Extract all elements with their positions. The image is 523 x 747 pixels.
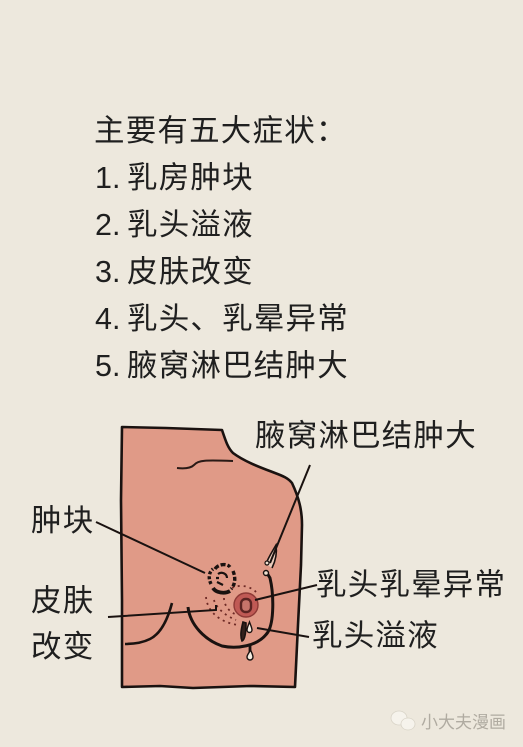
symptom 4: 乳头、乳晕异常 — [127, 302, 349, 336]
symptom 4: 4. — [95, 302, 120, 336]
watermark text: 小大夫漫画 — [421, 713, 506, 732]
label: nipple discharge: 乳头溢液 — [312, 619, 439, 653]
icon: nipple and areola — [234, 593, 258, 617]
symptom list — [94, 114, 349, 383]
right breast curve — [188, 573, 273, 647]
list heading: 主要有五大症状： — [94, 114, 348, 148]
symptom 1: 1. — [95, 161, 120, 195]
icon: discharge drops — [241, 622, 253, 660]
skin change dots — [206, 586, 256, 625]
collarbone line — [177, 460, 233, 468]
torso illustration — [121, 427, 302, 688]
symptom 1: 乳房肿块 — [127, 161, 254, 195]
label: axillary lymph nodes: 腋窝淋巴结肿大 — [255, 419, 477, 453]
icon: watermark logo — [391, 711, 415, 730]
icon: lump — [209, 565, 235, 593]
symptom 5: 腋窝淋巴结肿大 — [127, 349, 349, 383]
leader lines — [96, 465, 317, 637]
symptom 3: 3. — [95, 255, 120, 289]
left breast curve — [125, 603, 172, 644]
label: nipple and areola: 乳头乳晕异常 — [316, 568, 506, 602]
label: lump: 肿块 — [31, 504, 94, 538]
symptom 2: 2. — [95, 208, 120, 242]
symptom 2: 乳头溢液 — [127, 208, 254, 242]
symptom 3: 皮肤改变 — [127, 255, 254, 289]
symptom 5: 5. — [95, 349, 120, 383]
label: skin change line 2: 改变 — [31, 630, 94, 664]
armpit lymph node — [266, 545, 276, 568]
label: skin change: 皮肤 — [31, 584, 94, 618]
